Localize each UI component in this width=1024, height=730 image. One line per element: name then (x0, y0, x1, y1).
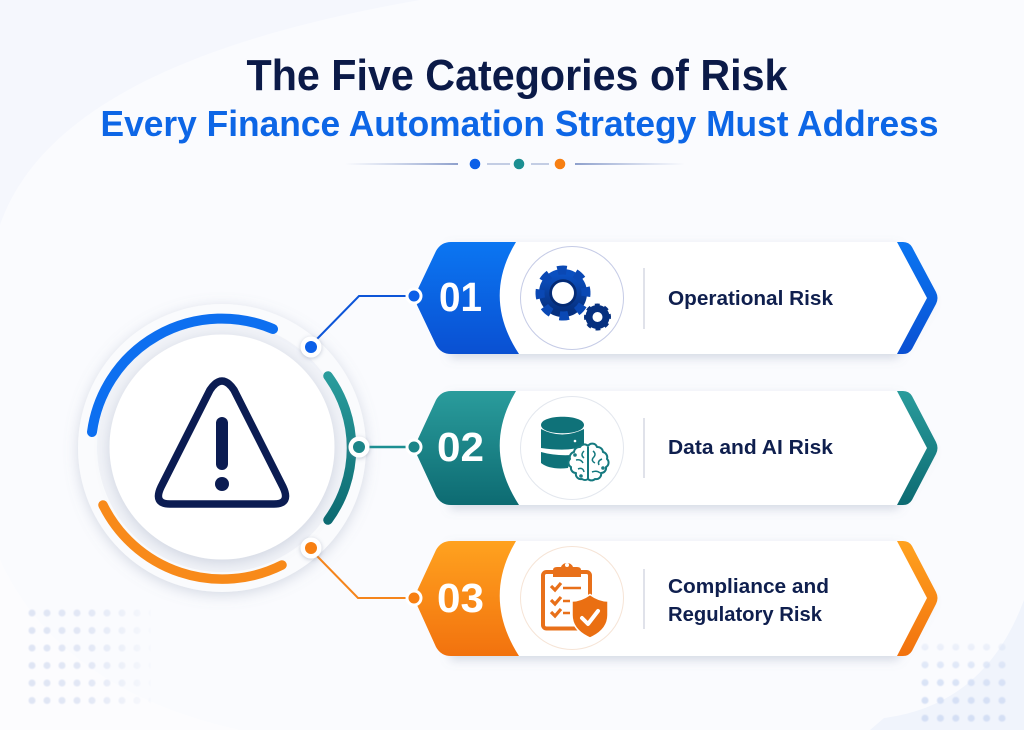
icon: gears (535, 265, 611, 330)
connector: teal (348, 436, 414, 458)
connector: blue (300, 296, 414, 358)
blue arc (92, 319, 273, 432)
label: Compliance and (668, 576, 829, 598)
connector end dot (406, 438, 422, 456)
brain (568, 444, 609, 480)
title (100, 51, 938, 144)
number: 03 (437, 575, 484, 621)
title divider with three dots (345, 159, 685, 169)
label: Regulatory Risk (668, 604, 823, 626)
number tab (416, 391, 519, 505)
dot grid: bottom left (28, 610, 136, 704)
right chevron (897, 391, 938, 505)
connector end dot (406, 288, 422, 304)
label (668, 576, 829, 626)
orange arc (103, 505, 282, 579)
inner white disc (110, 334, 334, 560)
icon: warning triangle (158, 381, 286, 504)
number: 02 (437, 424, 484, 470)
divider (643, 418, 645, 478)
label: Data and AI Risk (668, 437, 834, 459)
card body (450, 391, 932, 505)
icon circle (520, 246, 624, 350)
icon circle (520, 546, 624, 650)
icon circle (520, 396, 624, 500)
background (28, 601, 1024, 730)
card body (450, 242, 932, 354)
divider (643, 569, 645, 629)
panel: 03 compliance and regulatory risk (406, 541, 938, 656)
outer ring (78, 304, 366, 592)
title line 1: The Five Categories of Risk (246, 51, 788, 100)
title line 2: Every Finance Automation Strategy Must Address (100, 103, 938, 144)
panel: 01 operational risk (406, 242, 938, 354)
card body (450, 541, 932, 656)
teal arc (328, 376, 352, 520)
divider (643, 268, 645, 329)
right chevron (897, 242, 938, 354)
central warning circle (78, 304, 366, 592)
connector: orange (300, 538, 414, 598)
right chevron (897, 541, 938, 656)
icon: database and brain (541, 417, 609, 480)
arc channel (97, 322, 347, 572)
number tab (416, 242, 519, 354)
connector end dot (406, 590, 422, 606)
panel: 02 data and AI risk (406, 391, 938, 505)
number tab (416, 541, 519, 656)
icon: clipboard and shield (543, 563, 608, 638)
dot grid: bottom right (921, 644, 1006, 722)
number: 01 (439, 274, 482, 320)
label: Operational Risk (668, 288, 834, 310)
database (541, 417, 584, 468)
